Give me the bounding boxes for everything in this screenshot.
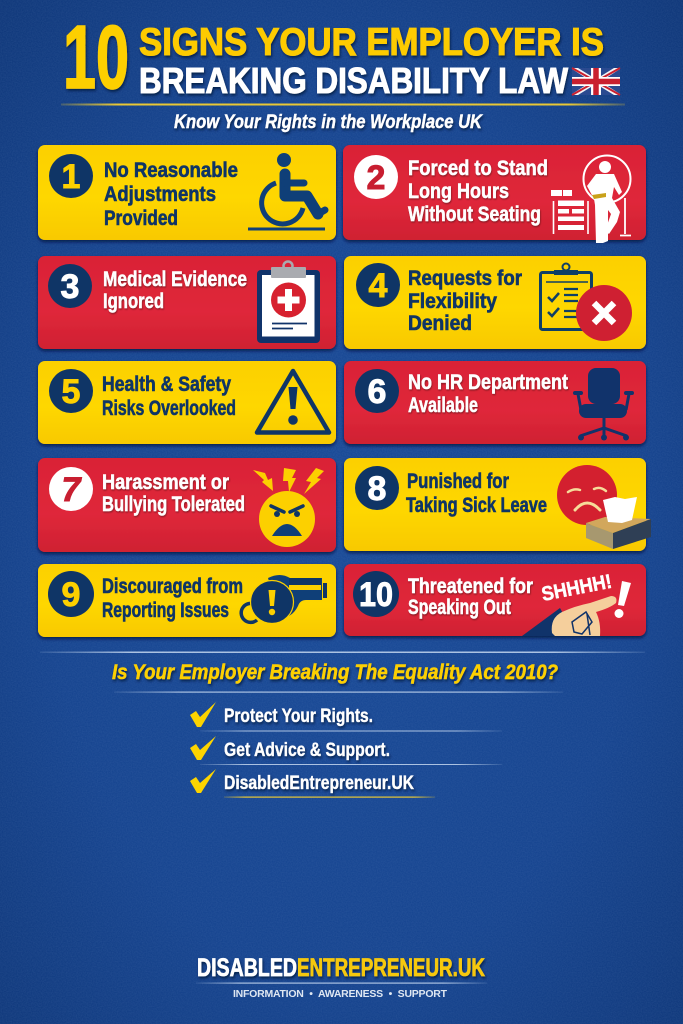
icon: angry face with bolts <box>253 468 324 547</box>
panel: sign 6 <box>344 361 646 444</box>
text: sign 8 <box>406 470 547 517</box>
number badge 3: 3 <box>61 268 79 306</box>
icon: medical clipboard <box>257 262 320 343</box>
text: sign 9 <box>102 575 243 622</box>
icon: UK flag <box>572 68 620 95</box>
footer logo <box>196 954 487 1000</box>
text: sign 4: Requests for <box>408 267 522 290</box>
text: sign 10 <box>408 575 533 619</box>
list item 3 <box>190 769 414 794</box>
number badge 1: 1 <box>62 158 80 196</box>
title line one: SIGNS YOUR EMPLOYER IS <box>139 21 604 64</box>
text: sign 10: Threatened for <box>408 575 533 598</box>
text: sign 1: Provided <box>104 207 178 230</box>
number badge 6 <box>355 369 399 413</box>
text: sign 1: No Reasonable <box>104 159 238 182</box>
logo wordmark suffix: ENTREPRENEUR.UK <box>297 954 485 982</box>
text: sign 5 <box>102 373 236 420</box>
text: sign 3: Ignored <box>103 290 164 313</box>
icon: whistle warning <box>241 575 327 624</box>
number badge 4: 4 <box>369 267 388 305</box>
list item 3: DisabledEntrepreneur.UK <box>224 773 414 794</box>
number badge 8 <box>355 466 399 510</box>
logo wordmark: DISABLED <box>197 954 297 982</box>
number badge 2: 2 <box>367 159 385 197</box>
number badge 3 <box>48 264 92 308</box>
title <box>63 8 604 108</box>
text: sign 8: Punished for <box>407 470 509 493</box>
text: sign 1 <box>104 159 238 230</box>
text: sign 7: Bullying Tolerated <box>102 493 245 516</box>
icon: sad face with tissue box <box>557 465 651 549</box>
number badge 6: 6 <box>368 373 386 411</box>
text: sign 7: Harassment or <box>102 471 229 494</box>
text: sign 5: Health & Safety <box>102 373 231 396</box>
number badge 2 <box>354 155 398 199</box>
panel: sign 4 <box>344 256 646 349</box>
text: sign 2 <box>408 157 548 226</box>
panel: sign 8 <box>344 458 651 551</box>
icon: standing worker <box>551 156 631 243</box>
number badge 10: 10 <box>359 576 393 614</box>
logo tagline: INFORMATION • AWARENESS • SUPPORT <box>233 988 448 1000</box>
text: sign 2: Without Seating <box>408 203 541 226</box>
icon: shushing hand <box>522 571 631 636</box>
icon: warning triangle <box>257 371 329 432</box>
text: sign 9: Reporting Issues <box>102 599 229 622</box>
text: sign 6: No HR Department <box>408 371 568 394</box>
panel: sign 5 <box>38 361 336 444</box>
text: sign 2: Forced to Stand <box>408 157 548 180</box>
panel: sign 2 <box>343 145 646 243</box>
text: sign 3: Medical Evidence <box>103 268 247 291</box>
text: sign 6: Available <box>408 394 478 417</box>
exclamation mark <box>614 581 631 618</box>
text: sign 4 <box>408 267 522 335</box>
number badge 9 <box>48 571 94 617</box>
number badge 8: 8 <box>368 470 386 508</box>
panel: sign 9 <box>38 564 336 637</box>
list item 2 <box>190 736 390 761</box>
number badge 7 <box>49 467 93 511</box>
shout text: SHHHH! <box>540 571 614 606</box>
list item 2: Get Advice & Support. <box>224 740 390 761</box>
text: sign 6 <box>408 371 568 417</box>
icon: wheelchair <box>248 153 325 229</box>
list item 1: Protect Your Rights. <box>224 706 373 727</box>
number badge 5 <box>49 369 93 413</box>
subtitle: Know Your Rights in the Workplace UK <box>174 112 483 133</box>
title number 10: 10 <box>63 8 129 108</box>
icon: office chair <box>575 368 632 440</box>
text: sign 5: Risks Overlooked <box>102 397 236 420</box>
heading: equality act question: Is Your Employer Breaking The Equality Act 2010? <box>112 661 558 684</box>
number badge 9: 9 <box>62 576 80 614</box>
number badge 1 <box>49 154 93 198</box>
text: sign 4: Flexibility <box>408 290 497 313</box>
panel: sign 1 <box>38 145 336 240</box>
number badge 4 <box>356 263 400 307</box>
icon: denied checklist <box>540 264 632 341</box>
panel: sign 7 <box>38 458 336 552</box>
text: sign 1: Adjustments <box>104 183 216 206</box>
list item 1 <box>190 702 373 727</box>
number badge 7: 7 <box>62 471 83 509</box>
list: action points <box>190 702 502 798</box>
text: sign 3 <box>103 268 247 313</box>
panel: sign 10 <box>344 564 646 636</box>
panel: sign 3 <box>38 256 336 349</box>
number badge 5: 5 <box>62 373 80 411</box>
text: sign 9: Discouraged from <box>102 575 243 598</box>
text: sign 4: Denied <box>408 312 472 335</box>
text: sign 8: Taking Sick Leave <box>406 494 547 517</box>
text: sign 2: Long Hours <box>408 180 509 203</box>
number badge 10 <box>353 571 399 617</box>
text: sign 10: Speaking Out <box>408 596 511 619</box>
text: sign 7 <box>102 471 245 516</box>
title line two: BREAKING DISABILITY LAW <box>139 60 568 101</box>
